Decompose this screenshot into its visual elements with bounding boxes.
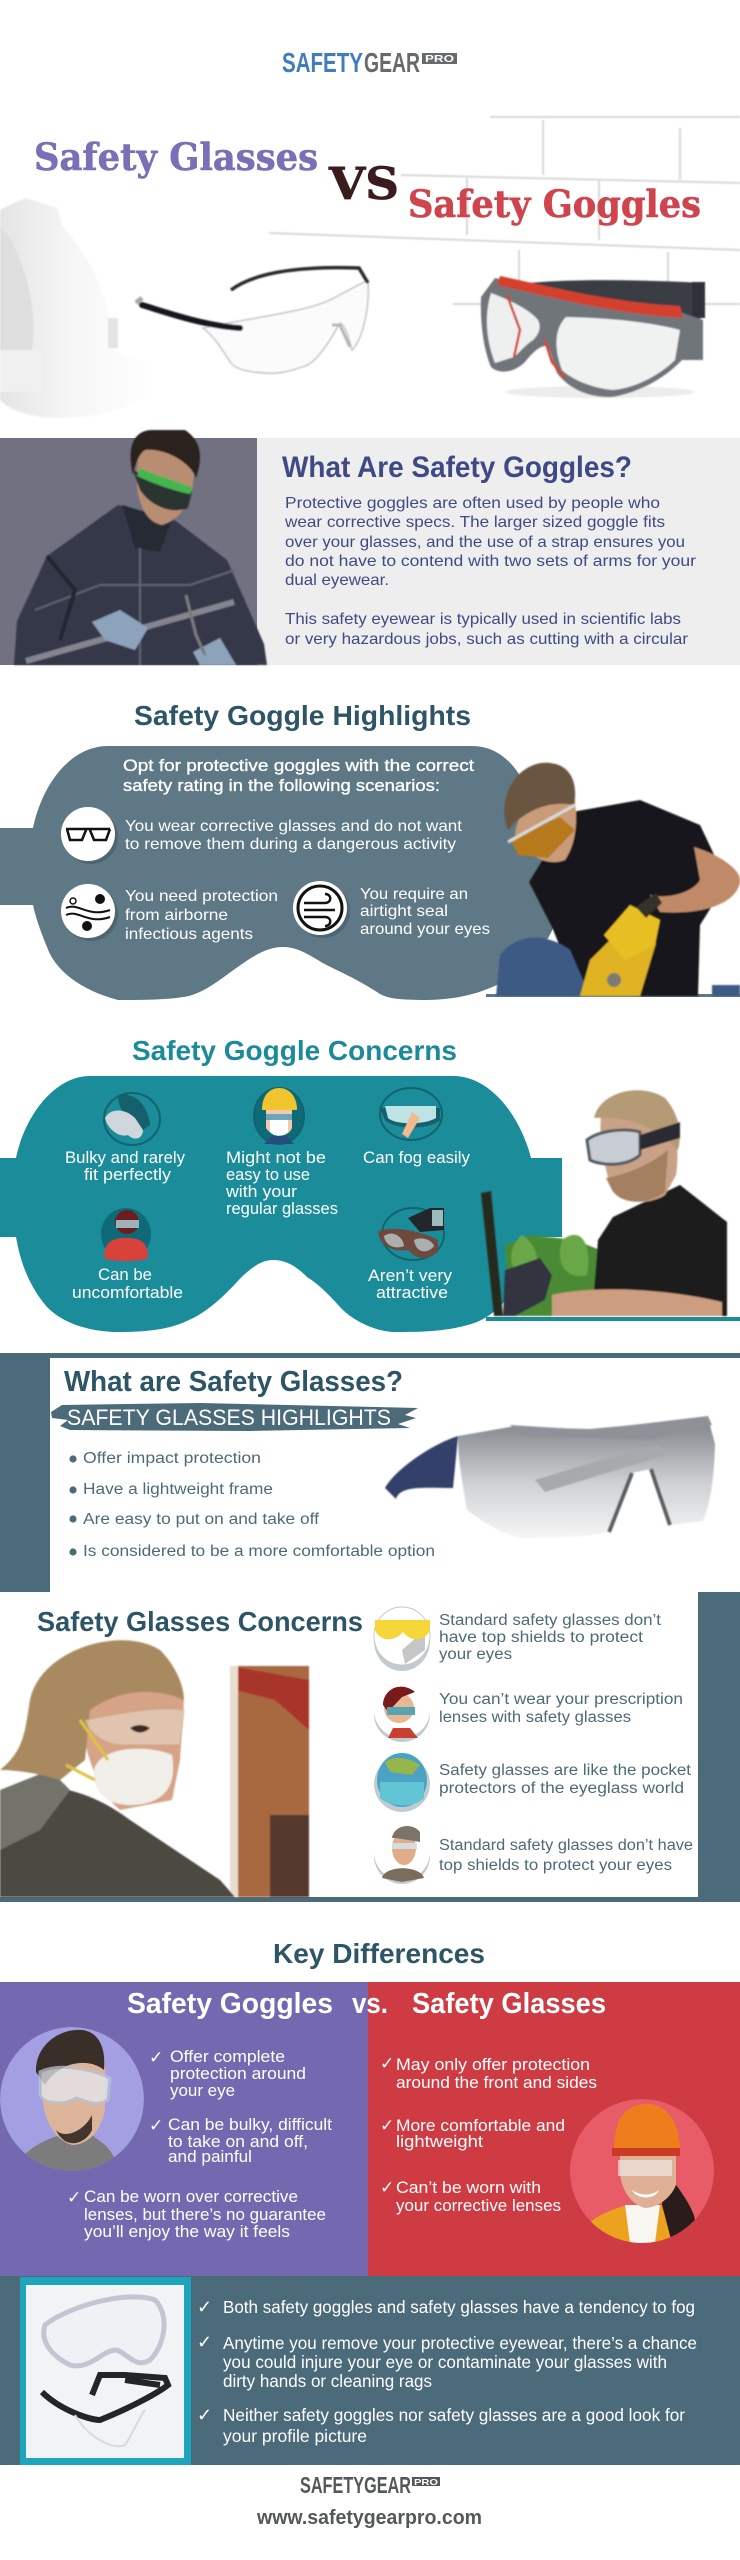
- banner: safety glasses highlights: SAFETY GLASSES HIGHLIGHTS: [67, 1405, 391, 1430]
- scenario text 3: [360, 886, 490, 938]
- drawback list: dirty hands or cleaning rags: [223, 2371, 432, 2391]
- concern text 3: [439, 1762, 692, 1797]
- concern text: regular glasses: Might not be: [226, 1149, 326, 1167]
- goggles column: you’ll enjoy the way it feels: [84, 2223, 290, 2241]
- goggles column: your eye: [170, 2082, 235, 2100]
- title: Safety Goggles: Safety Goggles: [408, 182, 701, 226]
- icon: airborne particles: [61, 884, 118, 941]
- goggles column: ✓: [149, 2116, 163, 2135]
- drawback list: [197, 2297, 697, 2446]
- icon: person with prescription glasses: [374, 1682, 430, 1742]
- photo: woman with mask and glasses: [0, 1640, 309, 1897]
- drawback list: ✓: [197, 2332, 212, 2352]
- goggles column: lenses, but there’s no guarantee: [84, 2206, 326, 2224]
- heading: Safety Glasses Concerns: [37, 1606, 363, 1637]
- panel: safety glasses concerns: [0, 1592, 740, 1902]
- body text: Protective goggles are often used by people who: [285, 495, 660, 512]
- concern text 4: top shields to protect your eyes: [439, 1857, 672, 1874]
- body text: wear corrective specs. The larger sized goggle fits: [284, 514, 665, 531]
- title: Safety Glasses: Safety Glasses: [34, 135, 318, 179]
- glasses column: ✓: [380, 2178, 394, 2197]
- photo: worker with drill: [496, 763, 740, 996]
- concern text: regular glasses: with your: [225, 1183, 298, 1201]
- body text: over your glasses, and the use of a strap ensures you: [285, 534, 685, 551]
- glasses column: Can’t be worn with: [396, 2179, 541, 2197]
- body text: or very hazardous jobs, such as cutting with a circular: [285, 631, 689, 648]
- concern text: regular glasses: [225, 1149, 338, 1218]
- hero: clear safety glasses: [136, 268, 368, 373]
- body text: dual eyewear.: [285, 572, 389, 589]
- logo: SafetyGear Pro header: [282, 47, 457, 78]
- panel: what are safety glasses: [0, 1353, 740, 1592]
- goggles column: Can be bulky, difficult: [168, 2116, 332, 2134]
- goggles column: ✓: [67, 2188, 81, 2207]
- drawback list: your profile picture: [223, 2426, 367, 2446]
- icon: uncomfortable person: [101, 1208, 151, 1261]
- concern text: regular glasses: regular glasses: [226, 1200, 338, 1218]
- logo: footer: PRO: [414, 2477, 439, 2487]
- goggles column: Offer complete: [170, 2048, 285, 2066]
- goggles column: protection around: [170, 2065, 306, 2083]
- icon: old goggles: [378, 1208, 444, 1260]
- concern text 2: [439, 1691, 683, 1726]
- concern text 4: Standard safety glasses don’t have: [439, 1837, 693, 1854]
- concern text 1: [439, 1612, 662, 1663]
- concern text 1: have top shields to protect: [439, 1629, 644, 1646]
- logo: SafetyGear Pro header: SAFETY: [282, 47, 363, 78]
- glasses column: your corrective lenses: [396, 2197, 561, 2215]
- glasses column: around the front and sides: [396, 2074, 597, 2092]
- glasses column: May only offer protection: [396, 2056, 590, 2074]
- concern text 2: lenses with safety glasses: [439, 1709, 631, 1726]
- scenario text 1: to remove them during a dangerous activity: [125, 836, 456, 853]
- logo: footer: SAFETYGEAR: [300, 2472, 411, 2498]
- intro text: safety rating in the following scenarios:: [123, 777, 440, 795]
- heading: safety goggle concerns: Safety Goggle Concerns: [132, 1035, 457, 1066]
- concern text: not attractive: [368, 1267, 453, 1302]
- panel: comparison: [0, 1982, 740, 2276]
- intro text: [123, 757, 474, 795]
- photo: man in goggles: [0, 2027, 144, 2172]
- comparison title: Safety Goggles: [127, 1988, 333, 2020]
- logo: SafetyGear Pro header: GEAR: [364, 47, 420, 78]
- body text: This safety eyewear is typically used in scientific labs: [285, 611, 681, 628]
- title: VS: VS: [328, 159, 399, 210]
- concern text: uncomfortable: uncomfortable: [72, 1284, 183, 1302]
- drawback list: Both safety goggles and safety glasses have a tendency to fog: [223, 2297, 695, 2317]
- heading: What Are Safety Goggles?: [282, 451, 632, 484]
- heading: What are Safety Glasses?: [64, 1366, 403, 1398]
- scenario text 1: [125, 818, 463, 853]
- concern text 3: Safety glasses are like the pocket: [439, 1762, 692, 1779]
- concern text 3: protectors of the eyeglass world: [439, 1780, 684, 1797]
- concern text 2: You can’t wear your prescription: [439, 1691, 683, 1708]
- comparison title: vs.: [352, 1988, 388, 2020]
- concern text: uncomfortable: Can be: [98, 1266, 152, 1284]
- goggles column: [67, 2048, 332, 2241]
- photo: worker wearing green goggles: [14, 430, 267, 665]
- concern text: bulky: Bulky and rarely: [65, 1149, 186, 1167]
- glasses column: ✓: [380, 2116, 394, 2135]
- scenario text 3: around your eyes: [360, 921, 490, 938]
- drawback list: Neither safety goggles nor safety glasses are a good look for: [223, 2405, 685, 2425]
- icon: worker with hard hat: [254, 1088, 304, 1144]
- glasses column: lightweight: [396, 2133, 483, 2151]
- concern text: not attractive: attractive: [376, 1284, 448, 1302]
- icon: yellow glasses: [374, 1607, 430, 1671]
- concern text: bulky: fit perfectly: [84, 1166, 172, 1184]
- panel: what are safety goggles: [0, 430, 740, 665]
- glasses column: [380, 2054, 597, 2215]
- goggles column: to take on and off,: [168, 2133, 308, 2151]
- concern text 1: your eyes: [439, 1646, 512, 1663]
- concern text: uncomfortable: [72, 1266, 183, 1302]
- glasses column: ✓: [380, 2054, 394, 2073]
- panel: common drawbacks: [0, 2276, 740, 2465]
- glasses column: More comfortable and: [396, 2117, 565, 2135]
- website url: www.safetygearpro.com: [256, 2507, 482, 2529]
- drawback list: ✓: [197, 2405, 212, 2425]
- logo: SafetyGear Pro header: PRO: [425, 54, 454, 65]
- scenario text 3: You require an: [360, 886, 468, 903]
- body text: do not have to contend with two sets of arms for your: [285, 553, 697, 570]
- bullet list: Are easy to put on and take off: [83, 1511, 320, 1528]
- hero: grey and red safety goggles: [481, 276, 705, 398]
- icon: airtight seal: [293, 881, 350, 938]
- photo: woman in orange hard hat: [570, 2099, 714, 2243]
- framed photo: goggles and glasses: [20, 2277, 191, 2465]
- comparison title: Safety Glasses: [412, 1988, 606, 2020]
- scenario text 3: airtight seal: [360, 903, 448, 920]
- bullet list: Is considered to be a more comfortable option: [83, 1543, 435, 1560]
- intro text: Opt for protective goggles with the correct: [123, 757, 474, 775]
- drawback list: ✓: [197, 2297, 212, 2317]
- goggles column: Can be worn over corrective: [84, 2188, 298, 2206]
- scenario text 2: You need protection: [125, 888, 278, 905]
- hero: white hard hat: [0, 198, 159, 418]
- scenario text 2: [125, 888, 278, 943]
- concern text: fog: Can fog easily: [363, 1149, 471, 1167]
- photo: man trimming hedge: [481, 1090, 727, 1316]
- concern text: bulky: [65, 1149, 186, 1184]
- concern text 4: [439, 1837, 693, 1874]
- photo: tinted safety glasses: [385, 1416, 715, 1538]
- scenario text 2: infectious agents: [125, 926, 253, 943]
- scenario text 1: You wear corrective glasses and do not want: [125, 818, 463, 835]
- drawback list: you could injure your eye or contaminate your glasses with: [223, 2352, 667, 2372]
- hero: brick wall sketch: [269, 117, 740, 305]
- body text: [284, 495, 697, 648]
- panel: goggle highlights shape: [0, 746, 740, 1000]
- goggles column: and painful: [168, 2148, 252, 2166]
- panel: goggle concerns shape: [0, 1076, 740, 1332]
- icon: fogged goggles: [380, 1088, 442, 1140]
- concern text: regular glasses: easy to use: [226, 1166, 310, 1184]
- bullet list: Offer impact protection: [83, 1450, 261, 1467]
- bullet list: [69, 1450, 435, 1560]
- icon: globe with mask: [374, 1753, 430, 1812]
- drawback list: Anytime you remove your protective eyewear, there’s a chance: [223, 2333, 697, 2353]
- icon: man with cap and glasses: [374, 1824, 430, 1884]
- bullet list: Have a lightweight frame: [83, 1481, 273, 1498]
- concern text: not attractive: Aren’t very: [368, 1267, 453, 1285]
- concern text 1: Standard safety glasses don’t: [439, 1612, 662, 1629]
- icon: bulky goggles: [104, 1093, 160, 1145]
- comparison title: [127, 1988, 606, 2020]
- icon: glasses: [61, 807, 118, 864]
- heading: key differences: Key Differences: [273, 1938, 485, 1969]
- scenario text 2: from airborne: [125, 907, 228, 924]
- heading: safety goggle highlights: Safety Goggle Highlights: [134, 700, 471, 731]
- goggles column: ✓: [149, 2048, 163, 2067]
